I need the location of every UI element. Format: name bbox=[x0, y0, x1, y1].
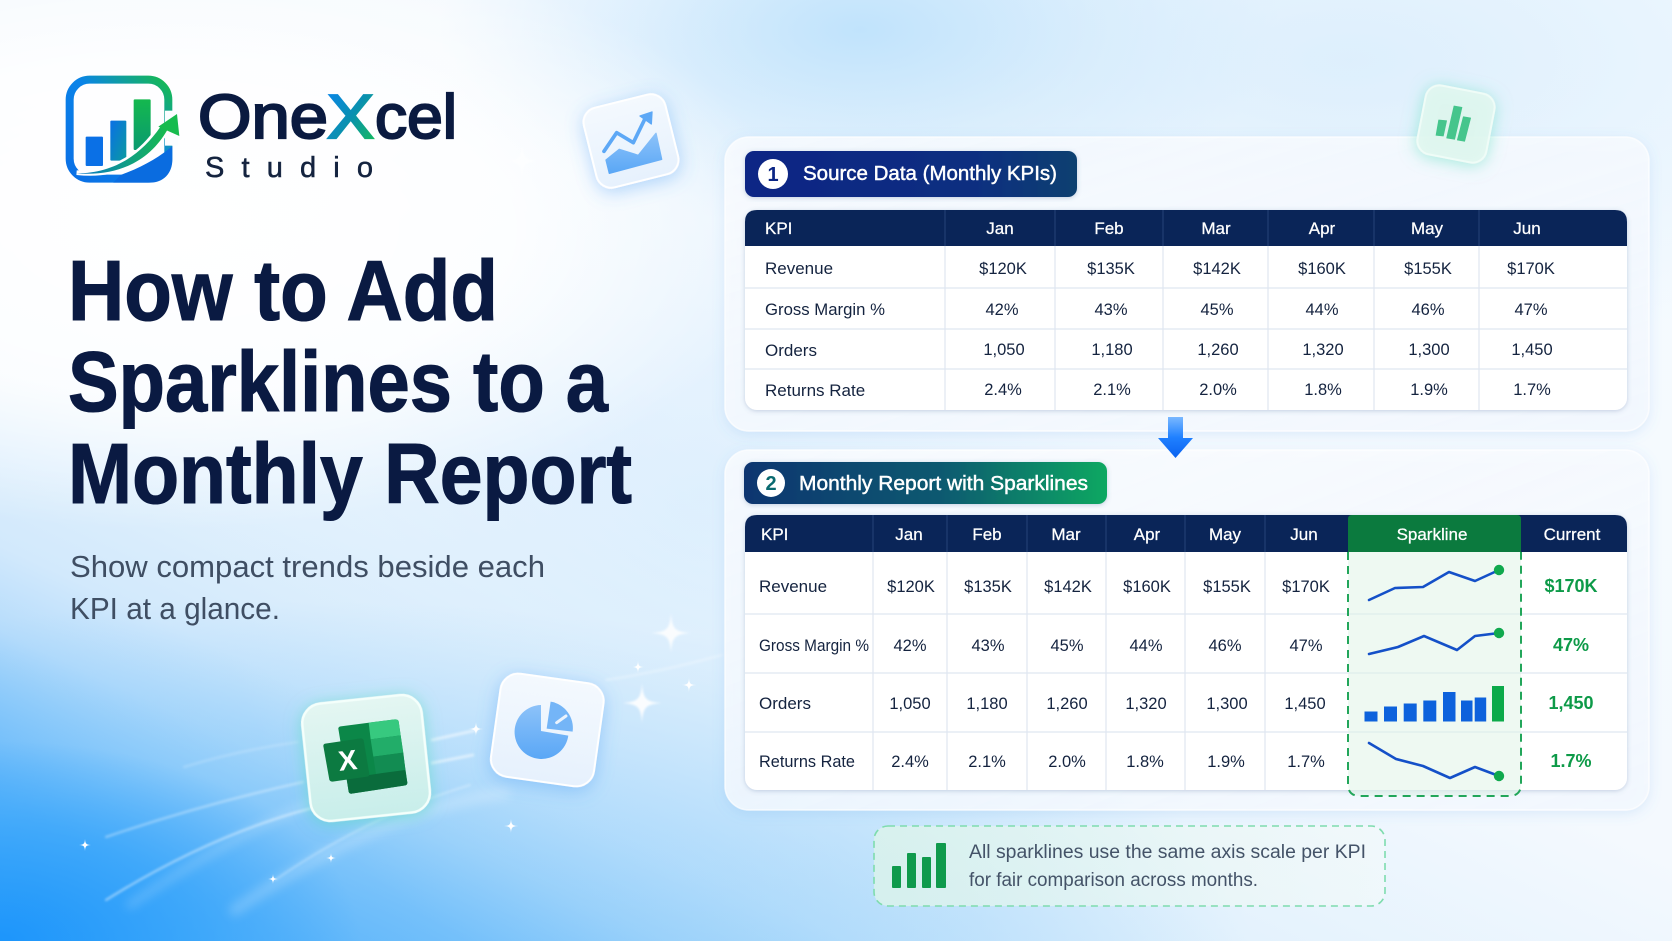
table: source data: $120K bbox=[979, 260, 1027, 278]
table: source data: 44% bbox=[1305, 301, 1339, 319]
table: source data: Orders bbox=[765, 341, 817, 360]
table: monthly report: $135K bbox=[964, 578, 1012, 596]
table: source data: 1,260 bbox=[1197, 341, 1239, 359]
arrow: source to report bbox=[1158, 417, 1193, 458]
table: monthly report: Jan bbox=[895, 525, 923, 544]
title bbox=[68, 244, 632, 522]
table: source data: Returns Rate bbox=[765, 381, 865, 400]
table: source data: $135K bbox=[1087, 260, 1135, 278]
table: monthly report: Revenue bbox=[759, 577, 827, 596]
table: monthly report: 1,050 bbox=[889, 695, 931, 713]
table: source data: $142K bbox=[1193, 260, 1241, 278]
icon: pie card bbox=[489, 671, 606, 789]
table: source data: 43% bbox=[1094, 301, 1128, 319]
table: source data: 2.4% bbox=[984, 381, 1022, 399]
heading: monthly report: Monthly Report with Sparklines bbox=[799, 473, 1088, 495]
subtitle: Show compact trends beside each bbox=[70, 549, 545, 584]
note text bbox=[969, 842, 1366, 891]
table: monthly report: $160K bbox=[1123, 578, 1171, 596]
panel: monthly report bbox=[725, 450, 1649, 810]
table: source data: 1.7% bbox=[1513, 381, 1551, 399]
table: monthly report: 47% bbox=[1553, 635, 1589, 655]
table: monthly report: 46% bbox=[1208, 637, 1242, 655]
table: monthly report: 47% bbox=[1289, 637, 1323, 655]
table: monthly report: Feb bbox=[972, 525, 1002, 544]
panel: source data bbox=[725, 137, 1649, 431]
logo wordmark: cel bbox=[375, 83, 457, 152]
table: source data: $160K bbox=[1298, 260, 1346, 278]
table: monthly report: $120K bbox=[887, 578, 935, 596]
table: monthly report: May bbox=[1209, 525, 1242, 544]
table: monthly report: 42% bbox=[893, 637, 927, 655]
table: source data bbox=[745, 210, 1627, 410]
table: source data: May bbox=[1411, 219, 1444, 238]
subtitle: KPI at a glance. bbox=[70, 591, 280, 626]
table: monthly report: 43% bbox=[971, 637, 1005, 655]
table: monthly report: Current bbox=[1544, 525, 1601, 544]
table: source data: Feb bbox=[1094, 219, 1124, 238]
table: monthly report: $170K bbox=[1544, 576, 1598, 596]
table: monthly report: Gross Margin % bbox=[759, 636, 869, 655]
heading: source data: 1 bbox=[767, 164, 779, 186]
logo wordmark bbox=[198, 83, 457, 152]
table: source data: Apr bbox=[1309, 219, 1336, 238]
table: monthly report: 1,260 bbox=[1046, 695, 1088, 713]
table: monthly report: $155K bbox=[1203, 578, 1251, 596]
table: monthly report: Orders bbox=[759, 694, 811, 713]
heading: monthly report: 2 bbox=[765, 473, 777, 495]
table: monthly report: 1,450 bbox=[1548, 693, 1594, 713]
table: source data: 47% bbox=[1514, 301, 1548, 319]
table: monthly report: Mar bbox=[1051, 525, 1081, 544]
table: monthly report: 1.7% bbox=[1550, 751, 1592, 771]
note text: for fair comparison across months. bbox=[969, 870, 1258, 891]
table: source data: Jan bbox=[986, 219, 1014, 238]
table: monthly report: 1.7% bbox=[1287, 753, 1325, 771]
table: source data: $155K bbox=[1404, 260, 1452, 278]
table: monthly report: 1.8% bbox=[1126, 753, 1164, 771]
icon: logo mark bbox=[70, 80, 179, 183]
table: source data: 1,180 bbox=[1091, 341, 1133, 359]
table: monthly report: 1,450 bbox=[1284, 695, 1326, 713]
light streaks and sparkles bbox=[79, 145, 722, 910]
icon: excel card bbox=[300, 693, 432, 823]
table: monthly report: $170K bbox=[1282, 578, 1330, 596]
table: source data: 2.1% bbox=[1093, 381, 1131, 399]
sparkline: orders bars bbox=[1364, 686, 1504, 722]
heading: source data: Source Data (Monthly KPIs) bbox=[803, 163, 1057, 185]
sparkline: revenue bbox=[1369, 565, 1504, 600]
title: Sparklines to a bbox=[68, 335, 609, 430]
table: monthly report: 44% bbox=[1129, 637, 1163, 655]
heading: monthly report bbox=[744, 462, 1107, 504]
logo wordmark: One bbox=[198, 83, 328, 152]
table: monthly report: 1,320 bbox=[1125, 695, 1167, 713]
note text: All sparklines use the same axis scale per KPI bbox=[969, 842, 1366, 863]
icon: excel card: X bbox=[337, 744, 359, 777]
heading: source data bbox=[745, 151, 1077, 197]
logo subtitle: Studio bbox=[205, 152, 373, 184]
table: source data: Revenue bbox=[765, 259, 833, 278]
table: monthly report: 2.0% bbox=[1048, 753, 1086, 771]
table: source data: 1.8% bbox=[1304, 381, 1342, 399]
table: monthly report: 2.1% bbox=[968, 753, 1006, 771]
logo wordmark: X bbox=[327, 83, 374, 152]
table: source data: 1,300 bbox=[1408, 341, 1450, 359]
table: source data: 42% bbox=[985, 301, 1019, 319]
title: Monthly Report bbox=[68, 427, 632, 522]
table: monthly report: 2.4% bbox=[891, 753, 929, 771]
sparkline: returns rate bbox=[1369, 743, 1504, 781]
table: monthly report: 1,180 bbox=[966, 695, 1008, 713]
logo bbox=[70, 80, 457, 184]
table: monthly report: $142K bbox=[1044, 578, 1092, 596]
table: monthly report: Apr bbox=[1134, 525, 1161, 544]
table: source data: KPI bbox=[765, 219, 792, 238]
table: source data: 46% bbox=[1411, 301, 1445, 319]
table: monthly report: Returns Rate bbox=[759, 752, 855, 771]
table: source data: 45% bbox=[1200, 301, 1234, 319]
table: monthly report: 45% bbox=[1050, 637, 1084, 655]
subtitle bbox=[70, 549, 545, 626]
table: monthly report: 1,300 bbox=[1206, 695, 1248, 713]
icon: bars card bbox=[1415, 83, 1497, 165]
table: source data: $170K bbox=[1507, 260, 1555, 278]
table: source data: Gross Margin % bbox=[765, 300, 885, 319]
sparkline: gross margin bbox=[1369, 628, 1504, 654]
callout: axis scale note bbox=[874, 826, 1385, 906]
sparkline column bbox=[1348, 515, 1521, 796]
table: monthly report: Jun bbox=[1290, 525, 1318, 544]
table: source data: 2.0% bbox=[1199, 381, 1237, 399]
icon: note bars bbox=[892, 843, 946, 888]
table: monthly report bbox=[745, 515, 1627, 790]
table: source data: 1,320 bbox=[1302, 341, 1344, 359]
title: How to Add bbox=[68, 244, 498, 339]
table: monthly report: 1.9% bbox=[1207, 753, 1245, 771]
table: source data: Mar bbox=[1201, 219, 1231, 238]
table: source data: 1.9% bbox=[1410, 381, 1448, 399]
sparkline column: Sparkline bbox=[1397, 525, 1467, 544]
icon: chart card bbox=[580, 91, 682, 191]
table: source data: 1,050 bbox=[983, 341, 1025, 359]
table: source data: Jun bbox=[1513, 219, 1541, 238]
table: monthly report: KPI bbox=[761, 525, 788, 544]
table: source data: 1,450 bbox=[1511, 341, 1553, 359]
